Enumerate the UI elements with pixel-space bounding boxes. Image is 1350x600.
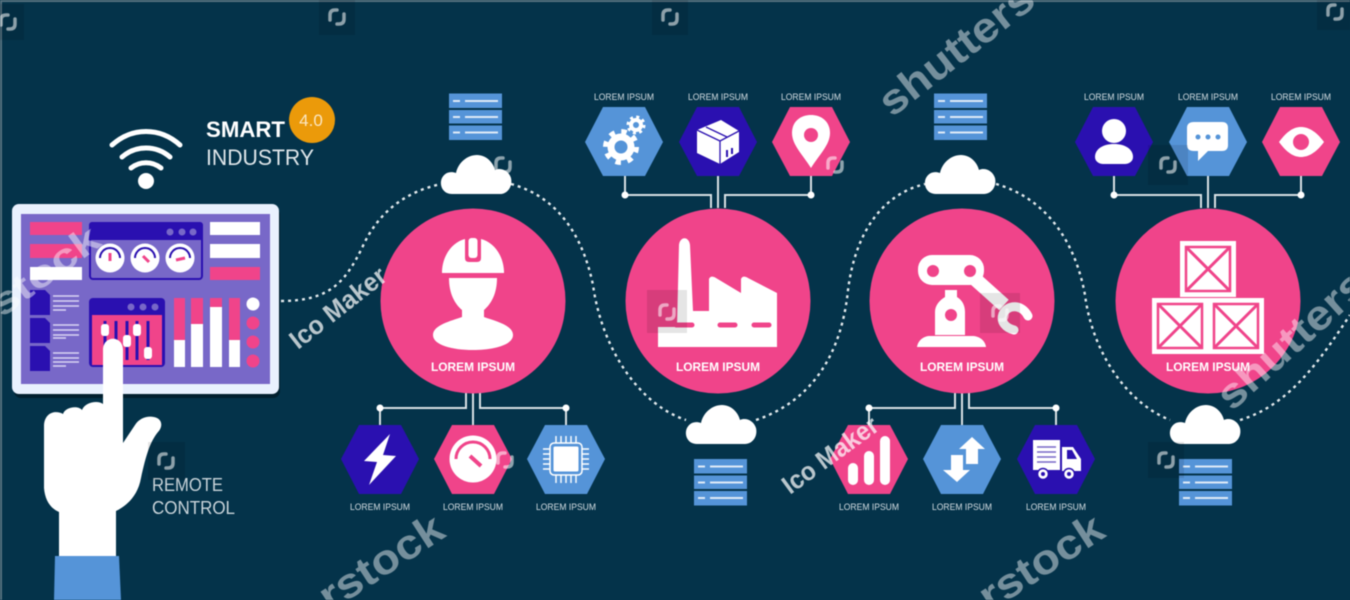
cloud 2 xyxy=(686,405,756,444)
hex: gauge xyxy=(434,425,512,512)
icon: chip xyxy=(543,436,589,483)
hex: person xyxy=(1075,92,1153,176)
icon: worker xyxy=(433,238,513,350)
hex: transfer arrows: LOREM IPSUM xyxy=(932,502,992,512)
watermark: ico maker left: Ico Maker xyxy=(283,260,392,355)
connectors: factory xyxy=(625,176,811,208)
hex: transfer arrows xyxy=(923,425,1001,512)
title: smart industry 4.0: SMART xyxy=(206,117,286,142)
hex: bar chart xyxy=(830,425,908,512)
shirt sleeve xyxy=(54,556,121,600)
hex: person: LOREM IPSUM xyxy=(1084,92,1144,102)
hex: location pin xyxy=(772,92,850,176)
panel: factory circle xyxy=(626,208,810,394)
icon: factory xyxy=(658,238,777,347)
panel: robot circle: LOREM IPSUM xyxy=(920,360,1004,374)
icon: hand pressing tablet xyxy=(44,339,161,600)
panel: robot circle xyxy=(870,208,1054,394)
label: remote control xyxy=(152,475,235,518)
icon: gears xyxy=(606,117,644,162)
hex: chat xyxy=(1169,92,1247,176)
hex: eye xyxy=(1262,92,1340,176)
hex: chat: LOREM IPSUM xyxy=(1178,92,1238,102)
gauges panel xyxy=(89,222,203,279)
tablet dashboard xyxy=(12,204,280,398)
icon: location pin xyxy=(792,115,830,168)
label: remote control: REMOTE xyxy=(152,475,223,495)
label: remote control: CONTROL xyxy=(152,498,235,518)
hex: bar chart: LOREM IPSUM xyxy=(839,502,899,512)
cloud 3 xyxy=(925,155,995,194)
file list xyxy=(30,290,79,371)
hex: truck xyxy=(1017,425,1095,512)
hex: location pin: LOREM IPSUM xyxy=(781,92,841,102)
icon: crates xyxy=(1152,241,1264,354)
panel: worker circle xyxy=(380,208,566,394)
panel: crates circle xyxy=(1116,208,1300,394)
level bars xyxy=(174,298,240,367)
connector nodes xyxy=(376,192,1304,412)
server 2 xyxy=(694,459,747,506)
hex: chip: LOREM IPSUM xyxy=(536,502,596,512)
title: smart industry 4.0: INDUSTRY xyxy=(206,145,314,170)
icon: chat bubble xyxy=(1187,122,1228,161)
icon: eye xyxy=(1279,127,1324,157)
hex: gears xyxy=(585,92,663,176)
icon: package xyxy=(697,120,739,164)
hex: energy xyxy=(341,425,419,512)
icon: wifi xyxy=(112,132,180,189)
icon: robot arm xyxy=(917,255,1028,347)
indicator dots xyxy=(246,298,260,368)
server 3 xyxy=(934,94,987,140)
watermark: ico maker centre: Ico Maker xyxy=(776,410,884,500)
icon: gauge xyxy=(450,436,496,482)
hex: package xyxy=(679,92,757,176)
icon: transfer arrows xyxy=(943,437,985,482)
connectors: robot xyxy=(869,393,1056,425)
right status bars xyxy=(210,222,260,280)
hex: gauge: LOREM IPSUM xyxy=(443,502,503,512)
dashed network path xyxy=(281,184,1350,420)
title: smart industry 4.0 xyxy=(206,97,335,170)
server 1 xyxy=(449,94,502,140)
badge: 4.0: 4.0 xyxy=(299,111,323,130)
connectors: worker xyxy=(380,393,566,425)
watermark squares xyxy=(0,0,1350,480)
hex: truck: LOREM IPSUM xyxy=(1026,502,1086,512)
icon: lightning xyxy=(364,434,396,485)
hex: package: LOREM IPSUM xyxy=(688,92,748,102)
icon: truck xyxy=(1033,440,1081,480)
cloud 4 xyxy=(1170,405,1240,444)
left status bars xyxy=(30,222,82,280)
hex: energy: LOREM IPSUM xyxy=(350,502,410,512)
watermark marks xyxy=(1,5,1342,468)
hex: chip xyxy=(527,425,605,512)
connectors: crates xyxy=(1114,176,1301,208)
mixer panel xyxy=(89,298,165,367)
hex: gears: LOREM IPSUM xyxy=(594,92,654,102)
cloud 1 xyxy=(441,155,511,194)
panel: factory circle: LOREM IPSUM xyxy=(676,360,760,374)
panel: crates circle: LOREM IPSUM xyxy=(1166,360,1250,374)
icon: person xyxy=(1095,119,1133,164)
icon: bar chart xyxy=(848,436,890,485)
server 4 xyxy=(1179,459,1232,506)
panel: worker circle: LOREM IPSUM xyxy=(431,360,515,374)
hex: eye: LOREM IPSUM xyxy=(1271,92,1331,102)
